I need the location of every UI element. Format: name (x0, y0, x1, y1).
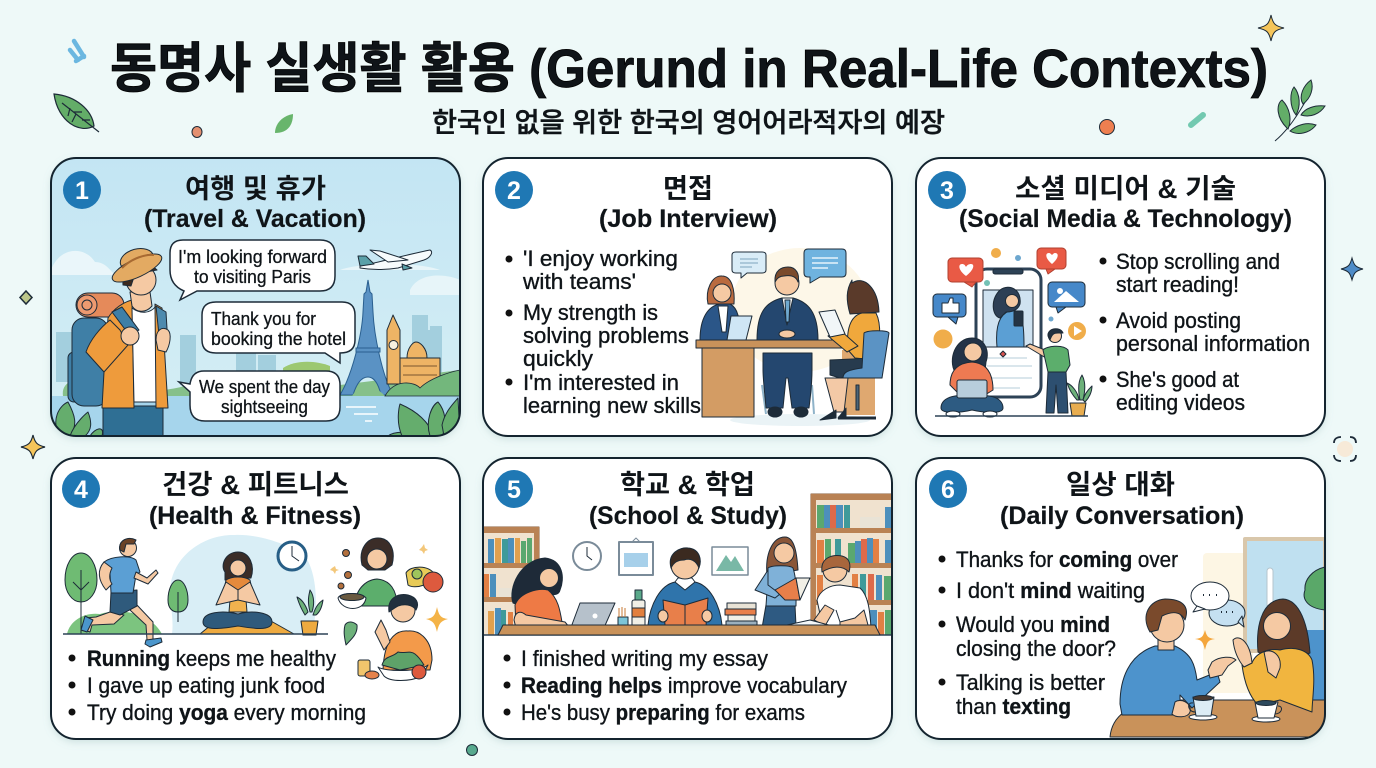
number badge 4 (62, 470, 100, 508)
interview illustration (696, 248, 889, 426)
bullet list: closing the door? (956, 636, 1116, 661)
number badge 1 (63, 171, 101, 209)
subtitle: 한국인 없을 위한 한국의 영어어라적자의 예장 (432, 108, 945, 138)
panel: daily conversation (916, 458, 1325, 739)
bullet list: learning new skills (523, 393, 701, 418)
card border (483, 458, 892, 739)
bullet list: start reading! (1116, 272, 1239, 297)
number badge 2 (495, 171, 533, 209)
heading: 일상 대화 (1066, 470, 1175, 500)
title: 동명사 실생활 활용 (Gerund in Real-Life Contexts) (110, 39, 1268, 99)
study illustration (483, 494, 892, 635)
panel: health and fitness (51, 458, 460, 739)
heading: 건강 & 피트니스 (162, 470, 349, 500)
bullet list: I don't mind waiting (956, 578, 1145, 603)
icon: branch right (1275, 80, 1325, 141)
heading (149, 470, 361, 530)
heading: (Health & Fitness) (149, 502, 361, 530)
card border (916, 458, 1325, 739)
bullet list: with teams' (522, 269, 636, 294)
heading: (Travel & Vacation) (144, 205, 366, 233)
heading: (Daily Conversation) (1000, 502, 1244, 530)
heading: (School & Study) (589, 502, 787, 530)
icon: star left (21, 435, 45, 459)
icon: focus brackets (1334, 437, 1356, 461)
heading: (Social Media & Technology) (959, 205, 1292, 233)
bullet list: Would you mind (956, 612, 1110, 637)
bullet list: quickly (523, 346, 593, 371)
bullet list: editing videos (1116, 390, 1245, 415)
icon: teal capsule (1191, 115, 1203, 125)
speech bubble 3 (179, 371, 340, 421)
bullet list: solving problems (523, 323, 689, 348)
number badge 5: 5 (507, 476, 521, 504)
bullet list: He's busy preparing for exams (521, 700, 805, 725)
icon: teal dot bottom (466, 744, 478, 756)
heading (144, 174, 366, 233)
speech bubble 3: We spent the day (199, 377, 330, 397)
card border (483, 158, 892, 436)
bullet list: Stop scrolling and (1116, 249, 1280, 274)
conversation illustration (1110, 539, 1325, 737)
bullet list: My strength is (523, 300, 658, 325)
number badge 2: 2 (507, 177, 521, 205)
number badge 3 (928, 171, 966, 209)
speech bubble 1: I'm looking forward (178, 247, 327, 267)
heading (959, 174, 1292, 233)
bullet list: Avoid posting (1116, 308, 1241, 333)
bullet list: Try doing yoga every morning (87, 700, 366, 725)
heading: 소셜 미디어 & 기술 (1015, 174, 1236, 204)
icon: eiffel tower (340, 280, 393, 395)
card border (916, 158, 1325, 436)
icon: leaf top left (54, 94, 99, 132)
icon: small green leaf (275, 114, 293, 133)
icon: blue dashes (70, 41, 84, 61)
travel scene illustration (51, 158, 460, 438)
social media illustration (933, 248, 1092, 417)
speech bubble 3: sightseeing (221, 397, 308, 417)
icon: star top right (1258, 15, 1284, 41)
bullet list (506, 246, 701, 418)
bullet list (504, 646, 847, 725)
panel: travel and vacation (51, 158, 460, 438)
bullet list (1100, 249, 1310, 415)
speech bubble 1 (170, 240, 335, 300)
bullet list: She's good at (1116, 367, 1239, 392)
panel: job interview (483, 158, 892, 436)
number badge 5 (495, 470, 533, 508)
number badge 6: 6 (941, 476, 955, 504)
heading (599, 174, 777, 233)
heading: 학교 & 학업 (620, 470, 755, 500)
bullet list: than texting (956, 694, 1071, 719)
bullet list: I finished writing my essay (521, 646, 768, 671)
bullet list: Reading helps improve vocabulary (521, 673, 847, 698)
number badge 3: 3 (940, 177, 954, 205)
card border (51, 458, 460, 739)
speech bubble 2: Thank you for (211, 309, 316, 329)
icon: foreground leaves (56, 398, 460, 436)
number badge 1: 1 (75, 177, 89, 205)
fitness illustration (63, 535, 448, 680)
icon: blue star right (1341, 258, 1363, 280)
bullet list (938, 547, 1178, 719)
heading (1000, 470, 1244, 530)
character: backpacker (68, 245, 170, 438)
speech bubble 2: booking the hotel (211, 329, 346, 349)
heading (589, 470, 787, 530)
panel: school and study (483, 458, 892, 739)
bullet list: personal information (1116, 331, 1310, 356)
speech bubble 2 (202, 302, 355, 363)
card border (51, 158, 460, 436)
bullet list: I'm interested in (523, 370, 679, 395)
bullet list: Talking is better (956, 670, 1105, 695)
icon: airplane (358, 250, 432, 270)
number badge 4: 4 (74, 476, 88, 504)
icon: big ben and palace (387, 315, 440, 388)
bullet list: Running keeps me healthy (87, 646, 336, 671)
heading: 면접 (663, 174, 713, 204)
panel: social media and technology (916, 158, 1325, 436)
speech bubble 1: to visiting Paris (194, 267, 311, 287)
icon: orange dot left (192, 126, 202, 138)
icon: small diamond left (20, 291, 32, 304)
bullet list: 'I enjoy working (523, 246, 678, 271)
number badge 6 (929, 470, 967, 508)
bullet list (68, 646, 366, 725)
bullet list: Thanks for coming over (956, 547, 1178, 572)
heading: (Job Interview) (599, 205, 777, 233)
icon: orange dot right (1100, 120, 1114, 134)
heading: 여행 및 휴가 (185, 174, 326, 204)
bullet list: I gave up eating junk food (87, 673, 325, 698)
